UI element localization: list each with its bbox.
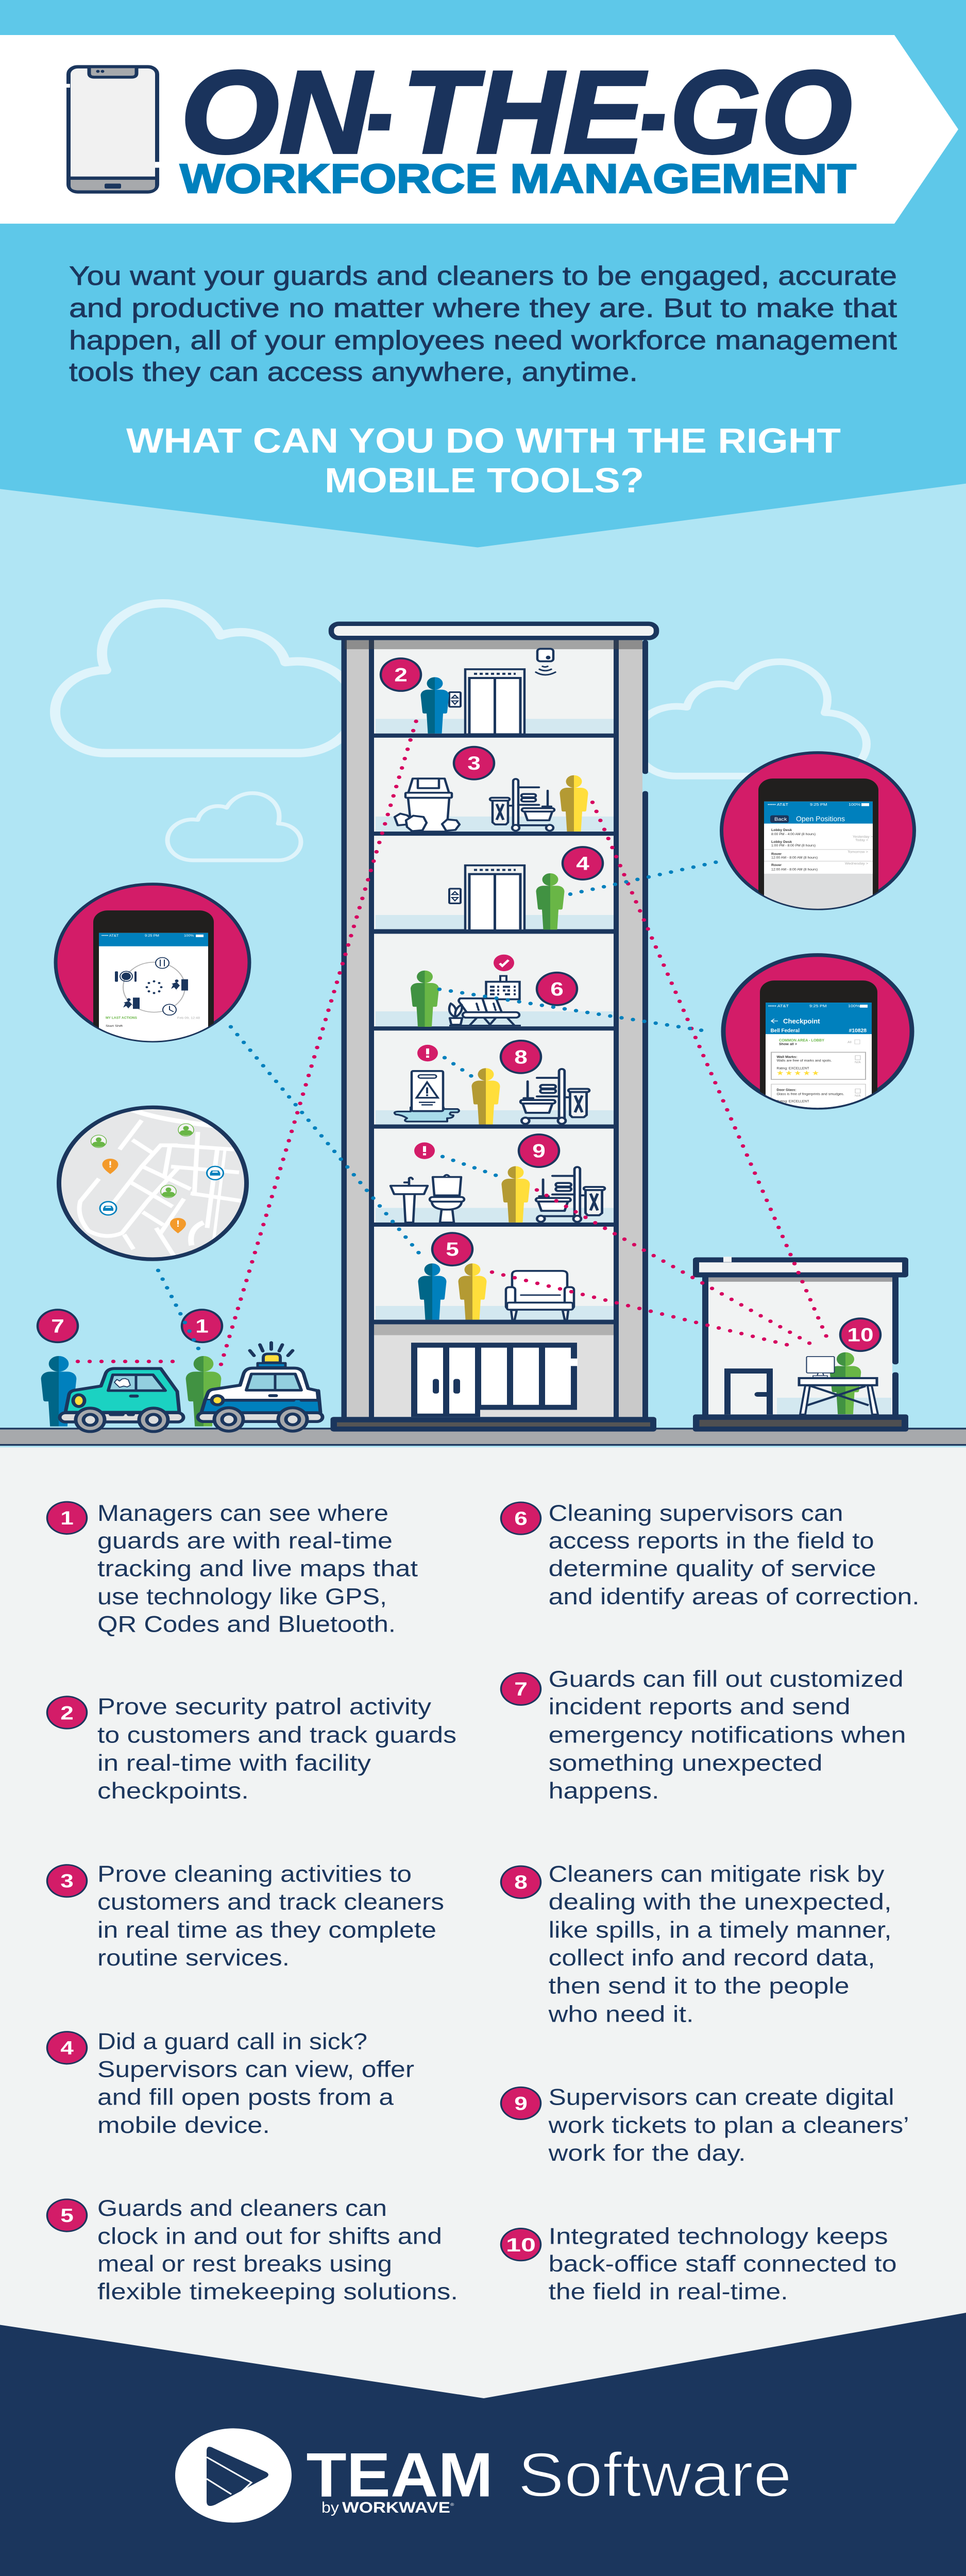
callout: open positions app: Rover: [771, 852, 782, 856]
wordmark: team software: WORKWAVE: [342, 2499, 450, 2516]
badge 3: [454, 747, 494, 779]
item 9: work for the day.: [548, 2140, 746, 2166]
item 7: incident reports and send: [549, 1694, 851, 1719]
callout: live map: [59, 1106, 246, 1259]
elevator floor 4: [465, 866, 524, 930]
exclamation bubble floor 8: [417, 1045, 438, 1061]
cleaning cart floor 3: [490, 779, 554, 831]
item 3: [47, 1861, 444, 1971]
wet floor sign and puddle: [395, 1071, 459, 1122]
item 5: [47, 2195, 458, 2304]
badge 7: 7: [51, 1315, 64, 1337]
callout: open positions app: 1:00 PM - 8:00 PM (8 hours): [771, 843, 816, 848]
wordmark: team software: [306, 2439, 792, 2516]
item 5: Guards and cleaners can: [97, 2195, 387, 2221]
person: guard floor 5: [418, 1263, 446, 1320]
badge 4: [563, 847, 603, 879]
heading: what can you do: [126, 421, 841, 500]
roof: [331, 624, 656, 638]
item 1: QR Codes and Bluetooth.: [97, 1611, 396, 1637]
item 2: Prove security patrol activity: [97, 1694, 431, 1719]
intro paragraph: You want your guards and cleaners to be engaged, accurate: [69, 261, 897, 291]
phone screen: ••••• AT&T: [101, 935, 118, 938]
lobby seating and wall board: [449, 955, 521, 1026]
phone screen: 100%: [184, 935, 194, 938]
clouds: [55, 603, 867, 860]
item 10: the field in real-time.: [549, 2279, 788, 2304]
callout: open positions app: 9:25 PM: [810, 803, 827, 807]
item 9: work tickets to plan a cleaners’: [548, 2112, 909, 2138]
intro paragraph: and productive no matter where they are. But to make that: [69, 293, 897, 323]
office roof: [696, 1257, 905, 1275]
computer and desk: [799, 1357, 878, 1414]
item 8: like spills, in a timely manner,: [549, 1917, 892, 1943]
callout: checkpoint app: [723, 955, 912, 1122]
potted plant: [449, 1004, 462, 1025]
callout: checkpoint app: Door Glass:: [776, 1088, 796, 1092]
item 7: [501, 1666, 906, 1804]
badge 9: [519, 1134, 559, 1167]
badge 5: [432, 1233, 472, 1265]
badge 6: 6: [550, 978, 564, 999]
callout: checkpoint app: #10828: [849, 1028, 867, 1033]
elevator buttons top floor: [449, 692, 461, 707]
bench: [459, 998, 519, 1025]
wordmark: team software: ®: [450, 2502, 454, 2507]
list of capabilities: [47, 1500, 920, 2304]
person: supervisor floor 4: [536, 873, 565, 929]
callout: open positions app: Rover: [771, 863, 782, 867]
person: guard with incident (7): [41, 1356, 76, 1427]
item 9: Supervisors can create digital: [549, 2084, 894, 2110]
intro paragraph: happen, all of your employees need workforce management: [69, 326, 897, 355]
item 10: Integrated technology keeps: [549, 2223, 888, 2249]
item 7: happens.: [549, 1778, 659, 1804]
item 4: and fill open posts from a: [97, 2084, 394, 2110]
phone screen: MY LAST ACTIONS: [106, 1016, 137, 1020]
item 2: 2: [60, 1702, 74, 1723]
item 1: Managers can see where: [97, 1500, 388, 1526]
entrance doors: [411, 1343, 578, 1417]
person: cleaner floor 3: [560, 775, 588, 832]
badge 1: 1: [195, 1315, 209, 1337]
item 6: 6: [514, 1507, 528, 1529]
item 8: [501, 1861, 892, 2027]
callout: open positions app: Wednesday >: [845, 861, 868, 866]
item 7: something unexpected: [549, 1750, 823, 1776]
callout: checkpoint app: Show all >: [779, 1042, 797, 1046]
callout: checkpoint app: Glass is free of fingerprints and smudges.: [776, 1092, 844, 1096]
phone screen: [93, 910, 214, 1054]
badge 1: [182, 1310, 222, 1342]
callout: checkpoint app: Wall Marks:: [776, 1055, 797, 1059]
wall board: [486, 976, 519, 999]
person: guard manager (1): [186, 1356, 221, 1427]
title: on-the-go: THE: [402, 47, 648, 178]
callout: open positions app: ••••• AT&T: [768, 803, 788, 807]
callout: checkpoint app: ★: [812, 1070, 819, 1077]
callout: checkpoint app: All: [848, 1041, 852, 1044]
callout: open positions app: Lobby Desk: [771, 840, 792, 844]
callout: open positions app: 12:00 AM - 8:00 AM (8 hours): [771, 855, 818, 859]
item 2: [47, 1694, 456, 1804]
background: bottom text section: [0, 1447, 966, 2345]
callout: checkpoint app: Rating: EXCELLENT: [776, 1066, 809, 1070]
item 1: [47, 1500, 418, 1637]
badge 7: [38, 1310, 78, 1342]
badge 9: 9: [532, 1140, 546, 1162]
item 3: 3: [60, 1870, 74, 1892]
cleaning cart floor 8: [520, 1069, 589, 1124]
item 2: checkpoints.: [97, 1778, 249, 1804]
person: back-office staff: [830, 1352, 861, 1414]
badge 2: [381, 658, 421, 691]
intro paragraph: tools they can access anywhere, anytime.: [69, 357, 638, 387]
callout: checkpoint app: N/A: [855, 1094, 861, 1097]
item 6: access reports in the field to: [549, 1528, 874, 1553]
item 9: [501, 2084, 909, 2166]
heading: what can you do: MOBILE TOOLS?: [325, 461, 644, 500]
header panel: [0, 0, 966, 548]
badge 3: 3: [467, 752, 481, 774]
item 6: and identify areas of correction.: [549, 1584, 920, 1609]
walls and interior: [341, 640, 648, 1420]
person: cleaner floor 5: [459, 1263, 486, 1320]
road: [0, 1428, 966, 1446]
item 8: 8: [514, 1871, 528, 1893]
item 5: meal or rest breaks using: [97, 2251, 392, 2277]
item 5: 5: [60, 2205, 74, 2226]
title: on-the-go: -: [640, 47, 666, 178]
title: on-the-go: -: [367, 47, 393, 178]
map roads: [77, 1106, 244, 1257]
item 6: [501, 1500, 920, 1609]
elevator buttons floor 4: [449, 889, 461, 903]
item 2: to customers and track guards: [97, 1722, 456, 1748]
callout: checkpoint app: ★: [803, 1070, 810, 1077]
badge 10: 10: [847, 1324, 874, 1346]
item 10: 10: [506, 2234, 536, 2256]
item 8: Cleaners can mitigate risk by: [549, 1861, 885, 1887]
wordmark: team software: TEAM: [306, 2439, 493, 2510]
badge 10: [840, 1318, 880, 1351]
small office building: [693, 1257, 908, 1432]
callout: open positions app: 12:00 AM - 8:00 AM (8 hours): [771, 867, 818, 871]
item 7: 7: [514, 1678, 528, 1700]
intro paragraph: [69, 261, 897, 387]
callout: checkpoint app: ★: [776, 1070, 784, 1077]
sink: [391, 1178, 428, 1223]
callout: checkpoint app: ★: [785, 1070, 792, 1077]
item 1: tracking and live maps that: [97, 1556, 418, 1581]
callout: checkpoint app: Checkpoint: [783, 1018, 820, 1025]
item 1: guards are with real-time: [97, 1528, 393, 1553]
callout: open positions app: 100%: [849, 803, 860, 807]
item 4: [47, 2029, 414, 2138]
badge 5: 5: [446, 1239, 459, 1260]
item 6: Cleaning supervisors can: [549, 1500, 843, 1526]
badge 8: [501, 1041, 541, 1073]
item 7: Guards can fill out customized: [549, 1666, 904, 1692]
cleaning cart floor 9: [536, 1167, 605, 1222]
police car: [198, 1343, 323, 1431]
callout: checkpoint app: Rating: EXCELLENT: [776, 1099, 809, 1103]
wordmark: team software: Software: [518, 2439, 792, 2510]
item 2: in real-time with facility: [97, 1750, 371, 1776]
callout: checkpoint app: COMMON AREA - LOBBY: [779, 1038, 824, 1042]
item 10: back-office staff connected to: [549, 2251, 897, 2277]
exclamation bubble floor 9: [414, 1142, 435, 1159]
item 4: 4: [60, 2037, 74, 2059]
logo mark: [175, 2428, 292, 2522]
title: on-the-go: ON: [180, 47, 375, 178]
badge 8: 8: [514, 1046, 528, 1067]
person: supervisor floor 6: [411, 971, 439, 1027]
item 6: determine quality of service: [549, 1556, 876, 1581]
heading: what can you do: WHAT CAN YOU DO WITH THE RIGHT: [126, 421, 841, 461]
person: guard floor 2: [420, 677, 449, 734]
sofa: [506, 1271, 574, 1322]
phone screen: Feb 09, 12:48: [177, 1016, 200, 1020]
title: on-the-go: GO: [670, 47, 852, 178]
item 3: in real time as they complete: [97, 1917, 436, 1943]
callout: checkpoint app: 9:25 PM: [809, 1004, 827, 1008]
callout: open positions app: Back: [774, 817, 788, 822]
trash can with paper: [395, 778, 460, 832]
callout: checkpoint app: N/A: [855, 1061, 861, 1064]
office door: [727, 1371, 770, 1414]
callout: open positions app: Yesterday >: [853, 835, 873, 839]
wordmark: team software: by: [321, 2499, 340, 2516]
callout: checkpoint app: ••••• AT&T: [768, 1004, 789, 1008]
callout: open positions app: 8:00 PM - 4:00 AM (8 hours): [771, 832, 816, 836]
phone screen: 9:25 PM: [145, 935, 159, 938]
dotted connector lines: [78, 714, 829, 1364]
item 4: Supervisors can view, offer: [97, 2056, 414, 2082]
badge 6: [537, 973, 577, 1005]
callout: open positions app: Open Positions: [796, 815, 845, 823]
item 5: flexible timekeeping solutions.: [97, 2279, 458, 2304]
phone screen: Start Shift: [106, 1025, 123, 1028]
page background: sky: [0, 0, 966, 1447]
callout: checkpoint app: ★: [794, 1070, 801, 1077]
item 3: customers and track cleaners: [97, 1889, 444, 1914]
callout: checkpoint app: Walls are free of marks and spots.: [776, 1058, 832, 1062]
subtitle: workforce management: WORKFORCE MANAGEMENT: [180, 156, 856, 201]
callout: mobile clock-in app: [56, 884, 249, 1054]
check bubble: [494, 955, 514, 971]
badge 2: 2: [394, 664, 408, 685]
item 1: 1: [60, 1507, 74, 1529]
numbered badges in scene: [38, 658, 880, 1351]
callout: checkpoint app: Bell Federal: [770, 1028, 800, 1033]
main building: [331, 624, 656, 1432]
callout: open positions app: Lobby Desk: [771, 828, 792, 832]
item 3: Prove cleaning activities to: [97, 1861, 412, 1887]
title: on-the-go: [180, 47, 852, 178]
item 8: dealing with the unexpected,: [549, 1889, 892, 1914]
item 9: 9: [514, 2093, 528, 2114]
item 5: clock in and out for shifts and: [97, 2223, 442, 2249]
person: cleaner floor 8: [472, 1068, 500, 1125]
item 1: use technology like GPS,: [97, 1584, 387, 1609]
teal car: [60, 1368, 183, 1432]
badge 4: 4: [576, 853, 590, 874]
item 4: mobile device.: [97, 2112, 270, 2138]
person: cleaner floor 9: [502, 1166, 530, 1223]
item 8: who need it.: [548, 2001, 694, 2027]
item 7: emergency notifications when: [549, 1722, 906, 1748]
item 10: [501, 2223, 897, 2304]
footer panel: [0, 2313, 966, 2576]
building base: [331, 1417, 656, 1432]
callout: open positions app: [721, 753, 914, 921]
icon: bluetooth beacon: [536, 649, 555, 675]
item 8: collect info and record data,: [549, 1945, 875, 1971]
callout: checkpoint app: 100%: [848, 1004, 860, 1008]
elevator top floor: [465, 669, 524, 734]
item 3: routine services.: [97, 1945, 290, 1971]
map markers: [91, 1124, 224, 1233]
office base: [693, 1414, 908, 1432]
toilet: [430, 1175, 464, 1223]
callout: open positions app: Tomorrow >: [848, 850, 868, 854]
callout: open positions app: Today >: [855, 838, 868, 842]
item 8: then send it to the people: [549, 1973, 850, 1998]
item 4: Did a guard call in sick?: [97, 2029, 367, 2054]
icon: smartphone: [65, 67, 160, 192]
